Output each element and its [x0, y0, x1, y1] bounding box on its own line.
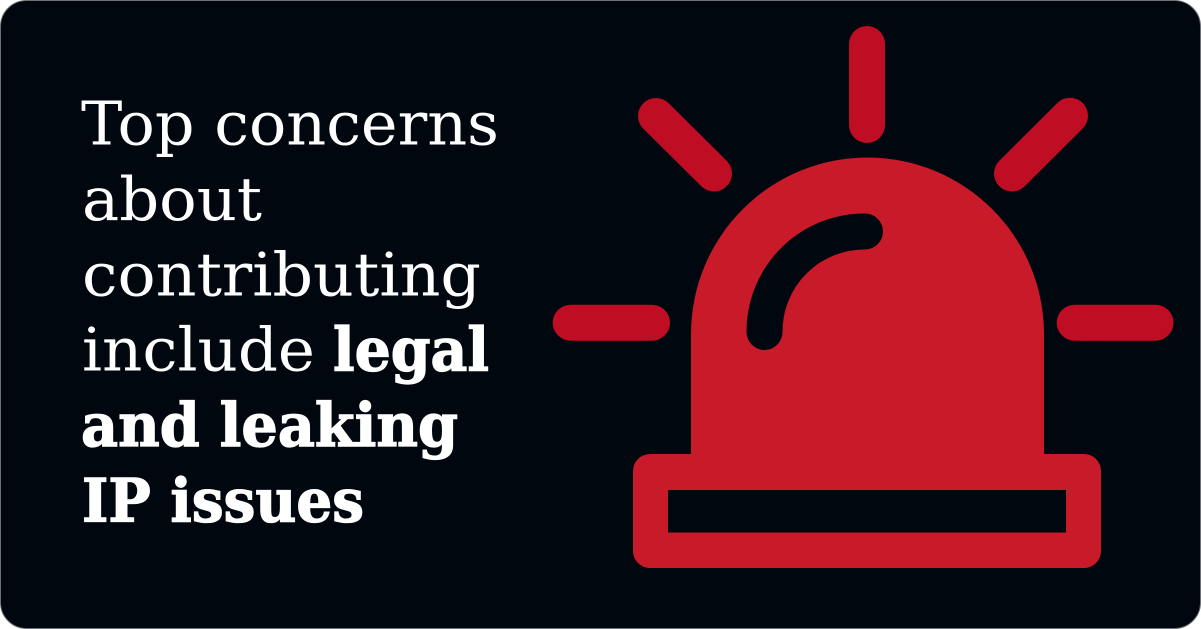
heading: top concerns about contributing: contributing: [82, 240, 481, 310]
heading: top concerns about contributing: include: [82, 316, 315, 386]
icon: siren dome: [691, 158, 1044, 460]
icon: dome highlight: [764, 231, 865, 332]
heading: top concerns about contributing: [81, 90, 499, 536]
icon: siren base: [633, 454, 1101, 568]
heading: top concerns about contributing: Top concerns: [81, 90, 499, 160]
heading: top concerns about contributing: IP issues: [82, 466, 364, 536]
icon: light rays: [571, 44, 1156, 323]
icon: red alarm siren: [571, 44, 1156, 568]
heading: top concerns about contributing: legal: [333, 316, 489, 386]
heading: top concerns about contributing: about: [82, 165, 262, 235]
heading: top concerns about contributing: and leaking: [81, 391, 458, 461]
